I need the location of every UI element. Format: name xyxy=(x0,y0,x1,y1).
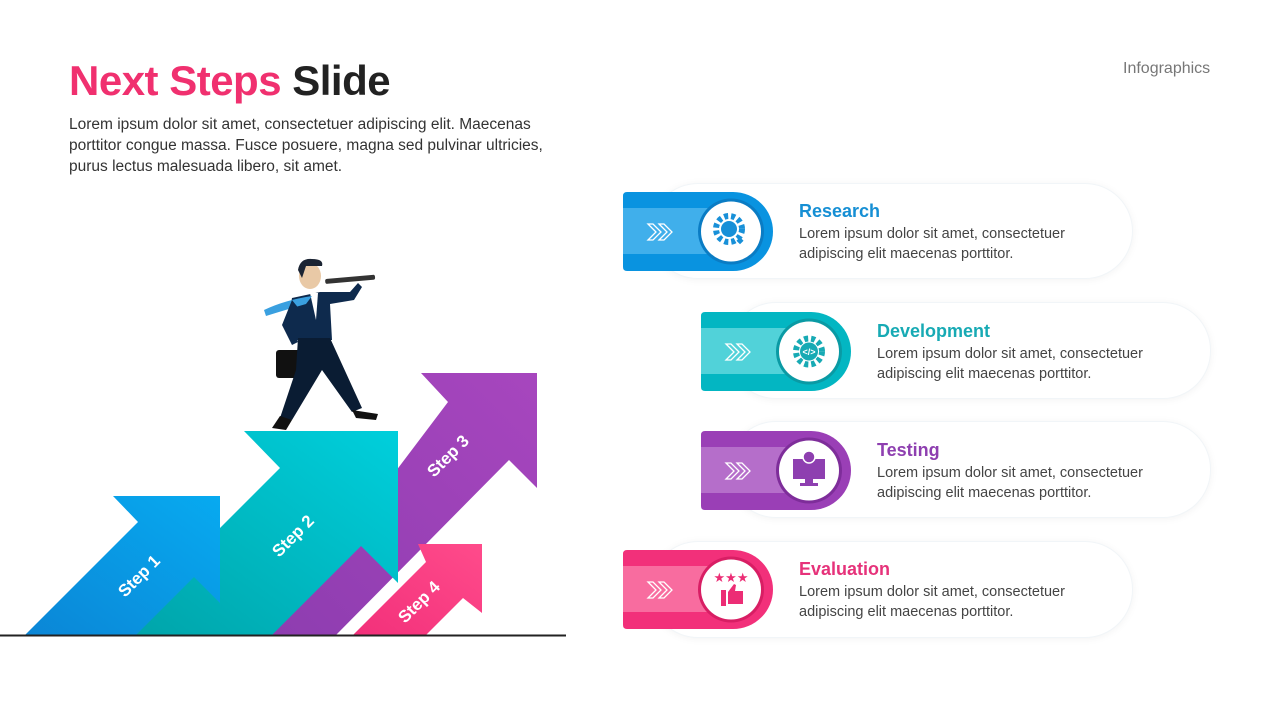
tab with icon xyxy=(701,312,851,391)
top-right label: Infographics xyxy=(1123,60,1210,77)
ground line xyxy=(0,634,566,636)
intro paragraph: Lorem ipsum dolor sit amet, consectetuer adipiscing elit. Maecenas porttitor congue massa. Fusce posuere, magna sed pulvinar ultricies, purus lectus malesuada libero, sit amet. xyxy=(69,116,543,175)
tab with icon: ★★★ xyxy=(714,570,748,585)
text: Lorem ipsum dolor sit amet, consectetuer adipiscing elit maecenas porttitor. xyxy=(799,584,1065,620)
title: Research: Research xyxy=(799,201,880,221)
arrow: step 1 xyxy=(25,496,220,635)
card: Development xyxy=(701,302,1211,399)
card: Evaluation xyxy=(623,541,1133,638)
arrow: step 4: Step 4 xyxy=(394,577,444,627)
text: Lorem ipsum dolor sit amet, consectetuer adipiscing elit maecenas porttitor. xyxy=(877,346,1143,382)
businessman with telescope xyxy=(264,259,378,430)
card: Testing xyxy=(701,421,1211,518)
illustration: step arrows with businessman xyxy=(0,258,566,636)
tab with icon xyxy=(701,431,851,510)
tab with icon xyxy=(623,192,773,271)
tab with icon: </> xyxy=(802,347,816,357)
card: Research xyxy=(623,183,1133,279)
arrow: step 2 xyxy=(113,431,398,635)
text: Lorem ipsum dolor sit amet, consectetuer adipiscing elit maecenas porttitor. xyxy=(877,465,1143,501)
tab with icon xyxy=(623,550,773,629)
arrow: step 4 xyxy=(353,544,482,635)
title: Development: Development xyxy=(877,321,990,341)
arrow: step 2: Step 2 xyxy=(268,511,318,561)
text: Lorem ipsum dolor sit amet, consectetuer adipiscing elit maecenas porttitor. xyxy=(799,226,1065,262)
arrow: step 1: Step 1 xyxy=(114,551,164,601)
title: Next Steps Slide xyxy=(69,57,390,104)
title: Evaluation: Evaluation xyxy=(799,559,890,579)
arrow: step 3: Step 3 xyxy=(423,431,473,481)
arrow: step 3 xyxy=(272,373,537,635)
title: Testing: Testing xyxy=(877,440,940,460)
